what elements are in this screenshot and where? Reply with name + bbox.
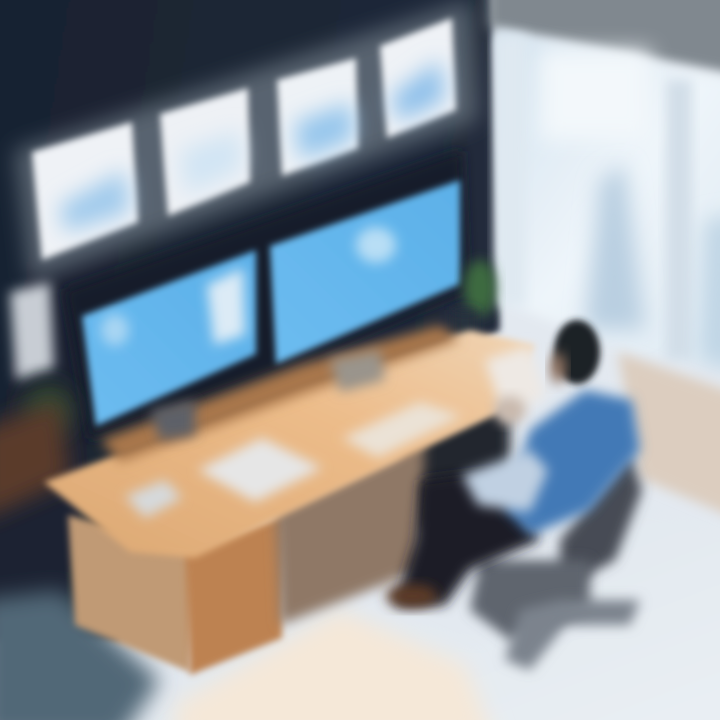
person	[386, 320, 642, 670]
side cabinet left	[0, 400, 70, 520]
under-desk shadow	[400, 400, 510, 530]
monitors	[64, 150, 468, 440]
low beige wall	[618, 352, 720, 520]
plant left	[24, 384, 72, 436]
desk	[44, 325, 535, 675]
keyboard right	[342, 402, 462, 458]
shoe	[386, 584, 438, 608]
keyboard left	[198, 438, 322, 502]
monitor bezel	[64, 150, 468, 440]
wall chart 1	[32, 122, 138, 260]
window	[496, 30, 720, 370]
floor	[120, 500, 720, 720]
floor shadow left	[0, 590, 160, 720]
right monitor screen	[270, 180, 460, 364]
arm	[462, 450, 548, 512]
frame band glow	[15, 0, 478, 280]
torso	[505, 390, 640, 535]
desk top	[44, 330, 535, 558]
wall charts row	[32, 18, 456, 260]
monitor stands	[150, 400, 195, 440]
warm floor glow	[175, 610, 495, 720]
desk front	[68, 440, 425, 675]
small wall note	[10, 282, 54, 380]
ceiling band	[488, 0, 720, 76]
hand and paper	[485, 345, 545, 424]
chair	[470, 455, 642, 670]
legs	[395, 470, 540, 605]
window mullion	[666, 80, 692, 360]
wall chart 4	[380, 18, 456, 138]
head	[550, 320, 600, 384]
city towers outside	[585, 165, 645, 330]
wall chart 2	[160, 88, 250, 216]
desk shadow under monitors	[100, 325, 460, 462]
mouse pad item	[125, 480, 182, 518]
wall chart 3	[277, 58, 358, 176]
left monitor screen	[82, 250, 256, 426]
dark wall	[0, 0, 500, 640]
plant right	[452, 260, 496, 360]
